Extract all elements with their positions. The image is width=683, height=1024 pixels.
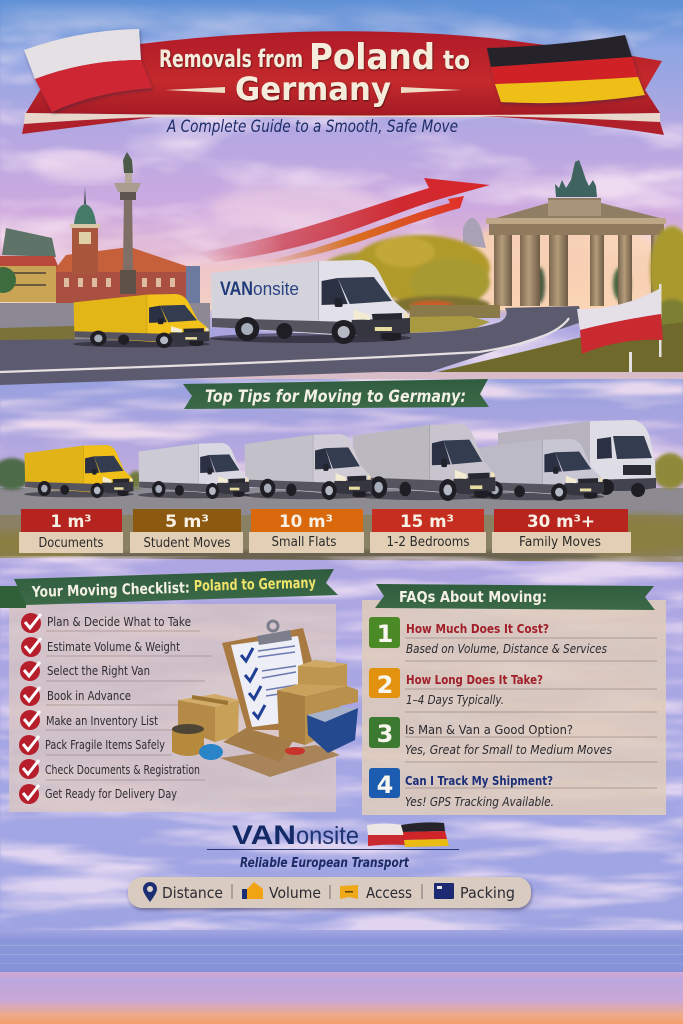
tag: 15 m3 1-2 Bedrooms: 1-2 Bedrooms	[386, 535, 470, 550]
checklist item: plan	[21, 613, 191, 633]
FAQ 3	[369, 717, 612, 757]
right-hand trees	[650, 226, 683, 351]
tag: 15 m3 1-2 Bedrooms	[370, 509, 486, 553]
volume tags	[19, 509, 631, 553]
title: Germany	[235, 70, 391, 108]
tagline: Reliable European Transport	[240, 856, 410, 871]
tag: 5 m3 Student Moves: Student Moves	[144, 536, 231, 551]
truck: 30 m3	[498, 420, 656, 497]
FAQ heading ribbon	[375, 584, 655, 610]
tape rolls	[172, 724, 223, 760]
checklist item: fragile: Pack Fragile Items Safely	[45, 737, 165, 752]
checklist heading ribbon: Your Moving Checklist:	[31, 579, 190, 601]
flag: Germany	[487, 35, 645, 103]
label: Packing: Packing	[460, 884, 515, 902]
FAQ 2: 1–4 Days Typically.	[406, 692, 504, 707]
checklist item: estimate	[21, 637, 180, 657]
checklist item: estimate: Estimate Volume & Weight	[47, 639, 180, 654]
checklist item: select	[20, 661, 150, 681]
tag: 10 m3 Small Flats: Small Flats	[272, 535, 337, 550]
FAQ 4: Yes! GPS Tracking Available.	[405, 794, 554, 809]
tape dispenser	[285, 747, 305, 755]
panel background	[9, 604, 336, 812]
title	[159, 37, 470, 108]
tag: 5 m3 Student Moves	[130, 509, 243, 553]
FAQ 4	[369, 768, 554, 809]
landmark: Warsaw old town	[0, 187, 200, 304]
section background: lower sky	[0, 558, 683, 940]
tag: 10 m3 Small Flats: 10 m³	[279, 512, 333, 532]
tag: 1 m3 Documents: Documents	[38, 536, 104, 551]
white van with VANonsite livery	[210, 260, 411, 344]
tag: 10 m3 Small Flats	[249, 509, 364, 553]
landmark: Sigismund column	[114, 152, 141, 294]
checklist item separators	[46, 631, 212, 780]
label: Volume: Volume	[269, 884, 321, 902]
van: 30 m3 front van	[470, 439, 604, 501]
illustration: clipboard and boxes	[172, 621, 358, 777]
panel background	[362, 600, 666, 815]
tag: 30 m3+ Family Moves: 30 m³+	[527, 512, 595, 532]
title: Poland	[309, 37, 435, 78]
panel: moving checklist	[0, 569, 358, 812]
rolled cardboard	[223, 728, 293, 762]
checklist item: book	[20, 686, 131, 706]
tag: 15 m3 1-2 Bedrooms: 15 m³	[400, 512, 454, 532]
autumn trees	[320, 235, 631, 314]
FAQ separators	[405, 638, 657, 788]
title: to	[443, 46, 470, 76]
boxes right stack	[277, 660, 358, 745]
FAQ 3: 3	[377, 720, 393, 748]
white van with VANonsite livery: onsite	[253, 279, 299, 299]
icon: access	[340, 885, 358, 899]
FAQ 3: Is Man & Van a Good Option?	[405, 722, 573, 737]
icon: packing	[434, 883, 454, 899]
van: 10 m3	[244, 434, 372, 500]
title flourish left	[165, 87, 225, 93]
checklist item: inventory	[20, 710, 158, 730]
heading ribbon: top tips: Top Tips for Moving to Germany:	[205, 387, 466, 407]
box left	[178, 694, 239, 742]
FAQ 2: How Long Does It Take?	[406, 672, 543, 687]
sky and Warsaw-to-Berlin background	[0, 0, 683, 320]
tag: 1 m3 Documents: 1 m³	[50, 512, 92, 532]
checklist item: delivery	[19, 784, 177, 804]
tag: 1 m3 Documents	[19, 509, 123, 553]
checklist item: documents: Check Documents & Registration	[45, 762, 200, 777]
footer colour bands	[0, 930, 683, 1024]
wordmark: VAN	[232, 820, 296, 850]
tag: 30 m3+ Family Moves	[492, 509, 631, 553]
van: 1 m3 yellow	[24, 445, 134, 498]
roadside bushes	[437, 322, 683, 372]
wordmark suffix: onsite	[296, 822, 359, 850]
label: Distance: Distance	[162, 884, 223, 902]
FAQ 4: 4	[377, 771, 393, 799]
flags pair	[367, 822, 449, 847]
checklist item: inventory: Make an Inventory List	[46, 713, 158, 728]
FAQ 2: 2	[377, 671, 393, 699]
FAQ 1	[369, 617, 607, 656]
checklist heading ribbon	[0, 569, 338, 608]
hero scene	[0, 152, 683, 385]
checklist item: select: Select the Right Van	[47, 663, 150, 678]
FAQ 1: Based on Volume, Distance & Services	[406, 641, 607, 656]
tag: 30 m3+ Family Moves: Family Moves	[519, 535, 601, 550]
small Polish flag on pole	[577, 284, 663, 372]
flag: Poland	[24, 29, 152, 112]
cardboard mat	[220, 745, 340, 777]
ribbon tails and stripe	[22, 31, 664, 135]
clipboard	[222, 621, 313, 730]
checklist item: plan: Plan & Decide What to Take	[47, 614, 191, 629]
title: Removals from	[159, 45, 303, 73]
label: Access: Access	[366, 884, 412, 902]
blue box	[307, 707, 358, 753]
FAQ 1: How Much Does It Cost?	[406, 621, 549, 636]
roadside trees	[0, 453, 683, 490]
banner	[22, 29, 664, 136]
plaza and verge	[0, 303, 500, 344]
title flourish right	[401, 87, 462, 93]
van size line-up	[0, 420, 683, 501]
section background: van sizes	[0, 372, 683, 562]
FAQ 4: Can I Track My Shipment?	[405, 773, 553, 788]
logo: VANonsite	[207, 820, 459, 871]
road marking	[0, 318, 569, 372]
checklist item: delivery: Get Ready for Delivery Day	[45, 786, 177, 801]
white van with VANonsite livery: VAN	[220, 279, 253, 300]
FAQ 3: Yes, Great for Small to Medium Moves	[405, 742, 612, 757]
icon: location pin	[143, 882, 157, 902]
checklist item: book: Book in Advance	[47, 688, 131, 703]
checklist item: documents	[19, 759, 200, 779]
heading ribbon: top tips	[183, 379, 489, 409]
subtitle: A Complete Guide to a Smooth, Safe Move	[166, 117, 458, 136]
road	[0, 306, 582, 385]
panel: FAQs	[362, 584, 666, 815]
arrow: Poland to Germany	[197, 178, 490, 262]
logo rule	[207, 849, 459, 850]
checklist item: fragile	[19, 735, 165, 755]
yellow van	[73, 294, 210, 348]
FAQ 2	[369, 668, 543, 707]
FAQ 1: 1	[377, 620, 393, 648]
van: 15 m3	[352, 424, 496, 501]
landmark: distant dome	[463, 218, 486, 248]
tag: 5 m3 Student Moves: 5 m³	[165, 512, 209, 532]
van: 5 m3	[138, 443, 250, 499]
factors pill	[128, 877, 531, 908]
landmark: Brandenburg Gate	[486, 160, 666, 306]
checklist heading ribbon: Poland to Germany	[194, 574, 316, 595]
icon: volume box	[242, 882, 263, 899]
FAQ heading ribbon: FAQs About Moving:	[399, 588, 547, 606]
